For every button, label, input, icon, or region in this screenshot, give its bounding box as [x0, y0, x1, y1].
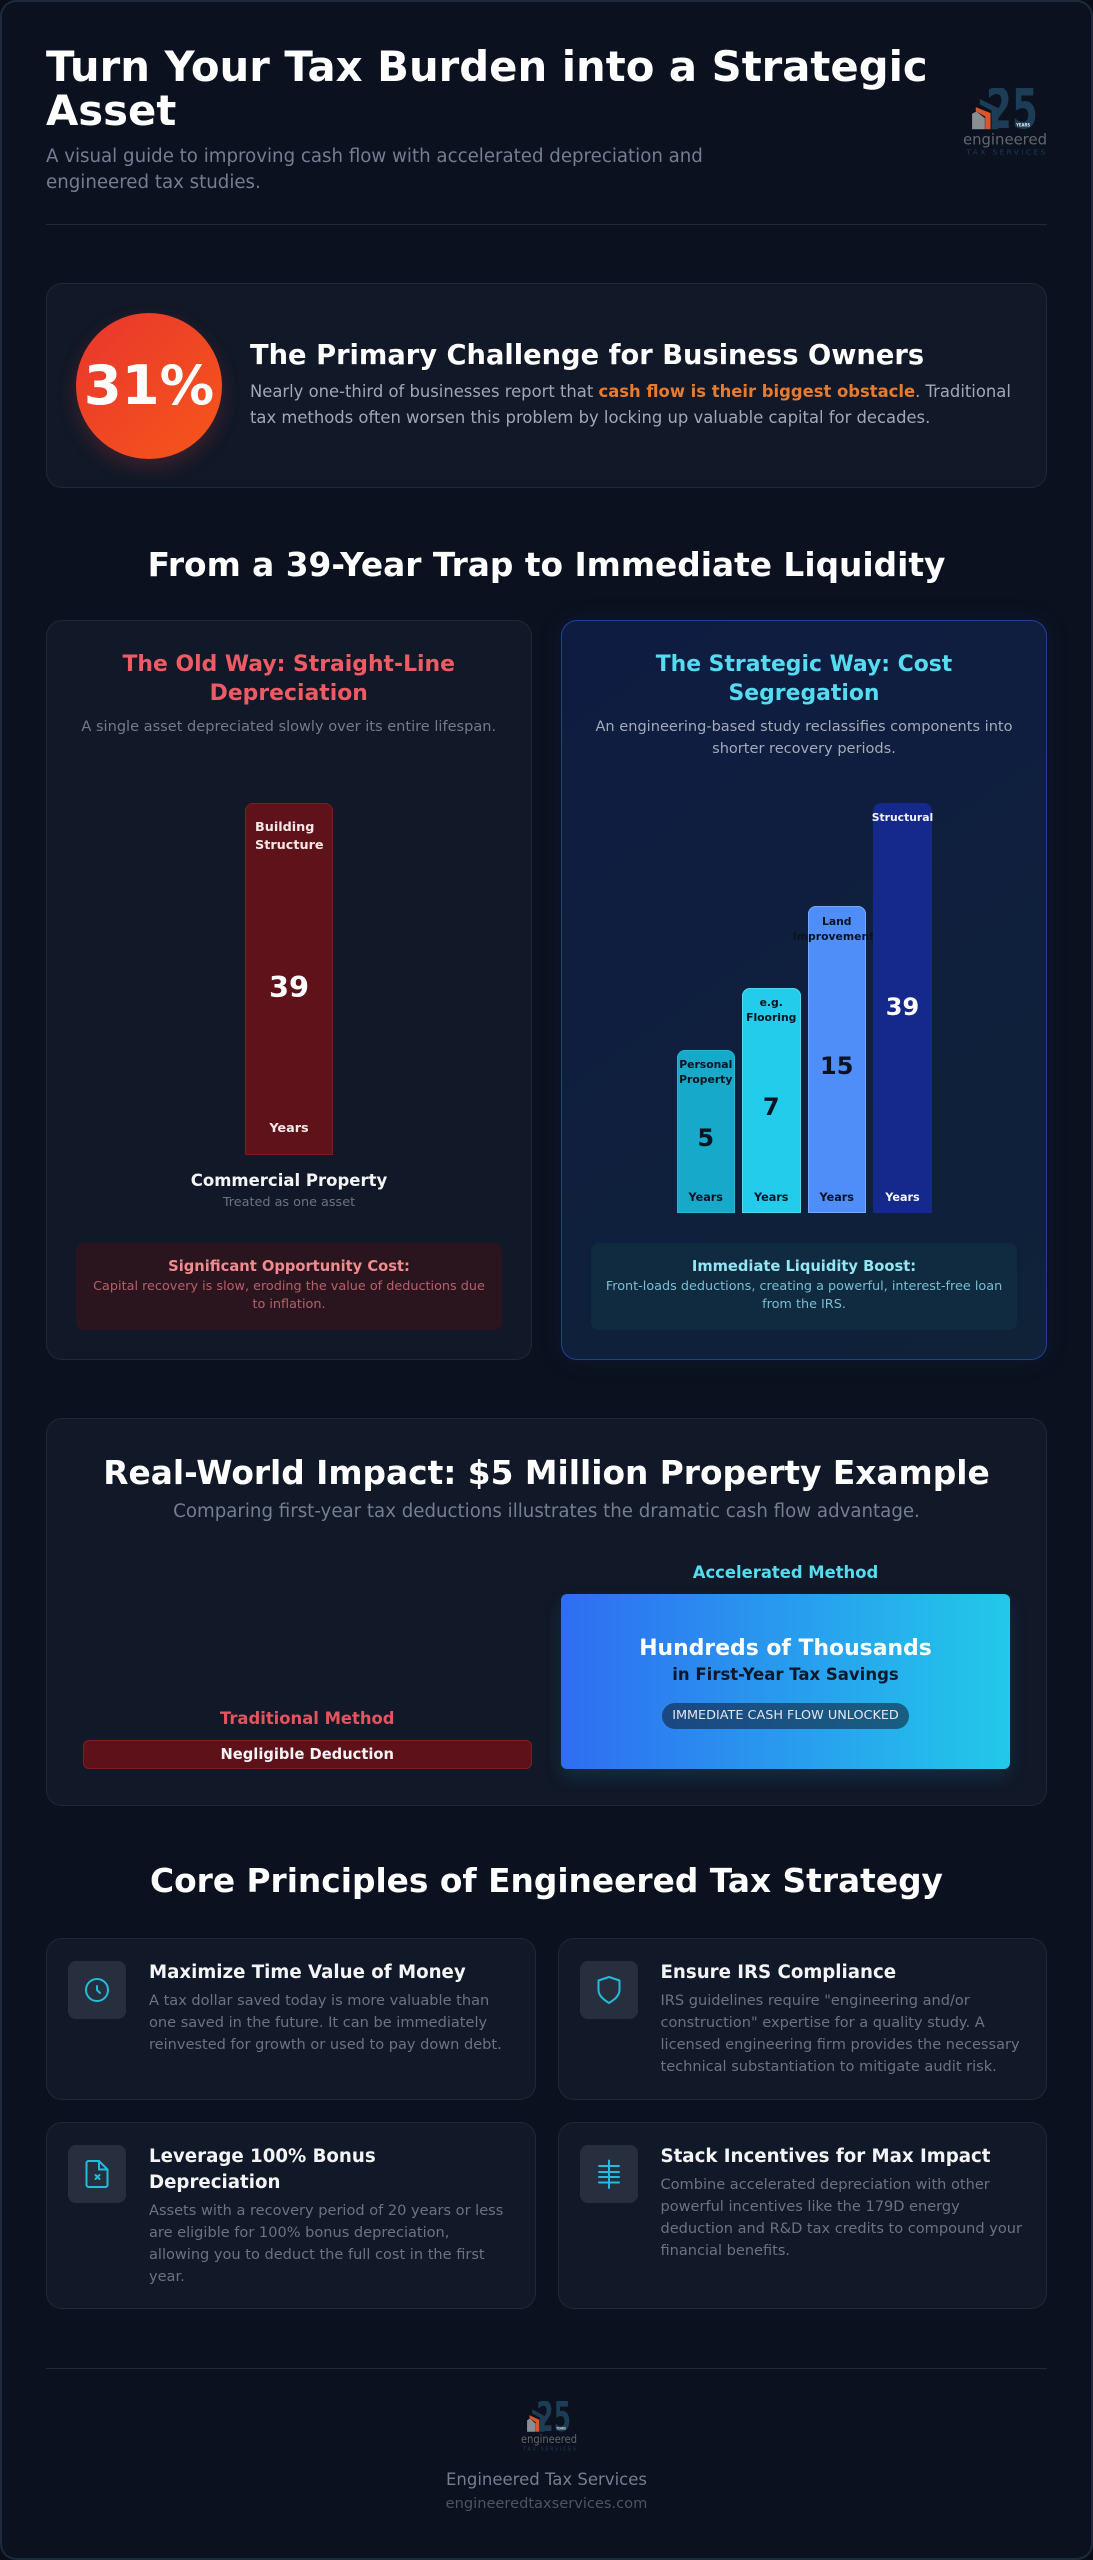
bar: personal property 5 years [676, 1050, 735, 1213]
card description: year. [149, 2268, 185, 2285]
old way heading: Depreciation [210, 681, 368, 706]
card title: Leverage 100% Bonus [149, 2146, 376, 2167]
card title [149, 2146, 376, 2193]
savings sub-headline: in First-Year Tax Savings [672, 1665, 899, 1684]
card description: IRS guidelines require "engineering and/or [660, 1992, 970, 2009]
card description: powerful incentives like the 179D energy [660, 2198, 960, 2215]
footer website: engineeredtaxservices.com [446, 2495, 647, 2512]
bar label: Building [255, 820, 314, 835]
card: bonus depreciation [46, 2122, 536, 2309]
savings pill [662, 1703, 909, 1729]
card title: Stack Incentives for Max Impact [660, 2146, 990, 2167]
card title: Ensure IRS Compliance [660, 1962, 896, 1983]
strategic way heading: The Strategic Way: Cost [656, 652, 952, 677]
accelerated method box [561, 1594, 1010, 1769]
card description: technical substantiation to mitigate audit risk. [660, 2058, 997, 2075]
bar: land improvements 15 years [808, 906, 866, 1213]
savings headline: Hundreds of Thousands [639, 1636, 932, 1661]
header title [46, 42, 928, 135]
callout: liquidity boost: from the IRS. [762, 1297, 846, 1312]
accelerated method label: Accelerated Method [693, 1563, 878, 1582]
bar: flooring 7 years [742, 988, 800, 1213]
header title: Asset [46, 86, 176, 135]
challenge text [250, 382, 1011, 427]
footer logo: YEARS [556, 2427, 566, 2431]
card description [149, 2202, 503, 2285]
old way heading: The Old Way: Straight-Line [122, 652, 455, 677]
card description: one saved in the future. It can be immediately [149, 2014, 487, 2031]
stat circle 31% [76, 313, 222, 459]
card description: deduction and R&D tax credits to compound your [660, 2220, 1022, 2237]
icon: shield [580, 1961, 638, 2019]
callout: liquidity boost: Immediate Liquidity Boost: [692, 1258, 916, 1275]
old way description: A single asset depreciated slowly over its entire lifespan. [81, 718, 496, 735]
impact heading: Real-World Impact: $5 Million Property Example [103, 1454, 990, 1492]
icon: stacked lines [580, 2145, 638, 2203]
panel: old way [46, 620, 532, 1360]
bar: flooring 7 years: e.g. [760, 996, 783, 1009]
bar: structural 39 years: Years [885, 1191, 920, 1204]
card: stack incentives [558, 2122, 1047, 2309]
bar chart: recovery periods [677, 803, 933, 1213]
bar: personal property 5 years: Years [689, 1191, 723, 1204]
bar: land improvements 15 years: Years [820, 1191, 854, 1204]
icon: clock [68, 1961, 126, 2019]
old way heading [122, 652, 455, 706]
callout: liquidity boost: Front-loads deductions, creating a powerful, interest-free loan [606, 1279, 1002, 1294]
callout: opportunity cost: Capital recovery is slow, eroding the value of deductions due [93, 1279, 485, 1294]
bar: personal property 5 years: Property [679, 1073, 732, 1086]
bar label: Structure [255, 838, 324, 853]
card description: allowing you to deduct the full cost in the first [149, 2246, 485, 2263]
traditional method bar: Negligible Deduction [221, 1746, 394, 1763]
bar: structural 39 years: 39 [886, 993, 919, 1021]
impact subtitle: Comparing first-year tax deductions illustrates the dramatic cash flow advantage. [173, 1501, 920, 1522]
strategic way heading: Segregation [729, 681, 879, 706]
card description [660, 1992, 1020, 2075]
card: IRS compliance [558, 1938, 1047, 2100]
header subtitle: A visual guide to improving cash flow with accelerated depreciation and [46, 146, 703, 167]
card: time value of money [46, 1938, 536, 2100]
card description: construction" expertise for a quality study. A [660, 2014, 985, 2031]
bar unit: Years [269, 1121, 309, 1136]
stat circle 31%: 31% [84, 354, 214, 417]
card description: Assets with a recovery period of 20 years or less [149, 2202, 503, 2219]
section heading: core principles: Core Principles of Engineered Tax Strategy [150, 1862, 943, 1900]
footer logo [521, 2401, 577, 2451]
bar: flooring 7 years: Years [754, 1191, 788, 1204]
card description: A tax dollar saved today is more valuable than [149, 1992, 489, 2009]
callout: opportunity cost [76, 1243, 502, 1330]
card description: financial benefits. [660, 2242, 790, 2259]
icon: file with x [68, 2145, 126, 2203]
card description [149, 1992, 502, 2053]
footer company name: Engineered Tax Services [446, 2470, 647, 2489]
bar sub-caption: Treated as one asset [223, 1195, 355, 1210]
bar value: 39 [269, 970, 309, 1004]
card title: Depreciation [149, 2172, 280, 2193]
header title: Turn Your Tax Burden into a Strategic [46, 42, 928, 91]
traditional method bar [83, 1740, 532, 1769]
header subtitle [46, 146, 703, 193]
strategic way description: An engineering-based study reclassifies components into [595, 718, 1013, 735]
bar: flooring 7 years: 7 [763, 1093, 780, 1121]
card title: Maximize Time Value of Money [149, 1962, 466, 1983]
challenge heading: The Primary Challenge for Business Owners [250, 340, 924, 371]
card description: licensed engineering firm provides the necessary [660, 2036, 1020, 2053]
header subtitle: engineered tax studies. [46, 172, 261, 193]
bar: personal property 5 years: Personal [679, 1058, 732, 1071]
card description [660, 2176, 1022, 2259]
bar: structural 39 years [873, 803, 932, 1213]
challenge text: Nearly one-third of businesses report that cash flow is their biggest obstacle. Traditional [250, 382, 1011, 401]
traditional method label: Traditional Method [220, 1709, 395, 1728]
bar: structural 39 years: Structural [872, 811, 933, 824]
card description: are eligible for 100% bonus depreciation, [149, 2224, 449, 2241]
panel: 31% challenge [46, 283, 1047, 488]
bar: land improvements 15 years: Land [822, 915, 852, 928]
callout: liquidity boost [591, 1243, 1017, 1330]
strategic way description: shorter recovery periods. [712, 740, 896, 757]
card description: reinvested for growth or used to pay down debt. [149, 2036, 502, 2053]
callout: opportunity cost: Significant Opportunity Cost: [168, 1258, 410, 1275]
bar: flooring 7 years: Flooring [746, 1011, 796, 1024]
strategic way description [595, 718, 1013, 757]
section heading: trap to liquidity: From a 39-Year Trap to Immediate Liquidity [148, 546, 945, 584]
savings pill: IMMEDIATE CASH FLOW UNLOCKED [672, 1708, 899, 1723]
panel: real-world impact [46, 1418, 1047, 1806]
bar: building structure 39 years [245, 803, 333, 1155]
panel: strategic way [561, 620, 1047, 1360]
challenge text: tax methods often worsen this problem by locking up valuable capital for decades. [250, 408, 930, 427]
bar caption: Commercial Property [191, 1171, 387, 1190]
card description: Combine accelerated depreciation with other [660, 2176, 990, 2193]
bar label [255, 820, 324, 853]
callout: opportunity cost: to inflation. [252, 1297, 326, 1312]
strategic way heading [656, 652, 952, 706]
bar: personal property 5 years: 5 [697, 1124, 714, 1152]
bar: land improvements 15 years: 15 [820, 1052, 853, 1080]
logo: engineered tax services 25 years: YEARS [1015, 123, 1030, 129]
bar: land improvements 15 years: Improvements [793, 930, 881, 943]
logo: engineered tax services 25 years [963, 88, 1047, 155]
